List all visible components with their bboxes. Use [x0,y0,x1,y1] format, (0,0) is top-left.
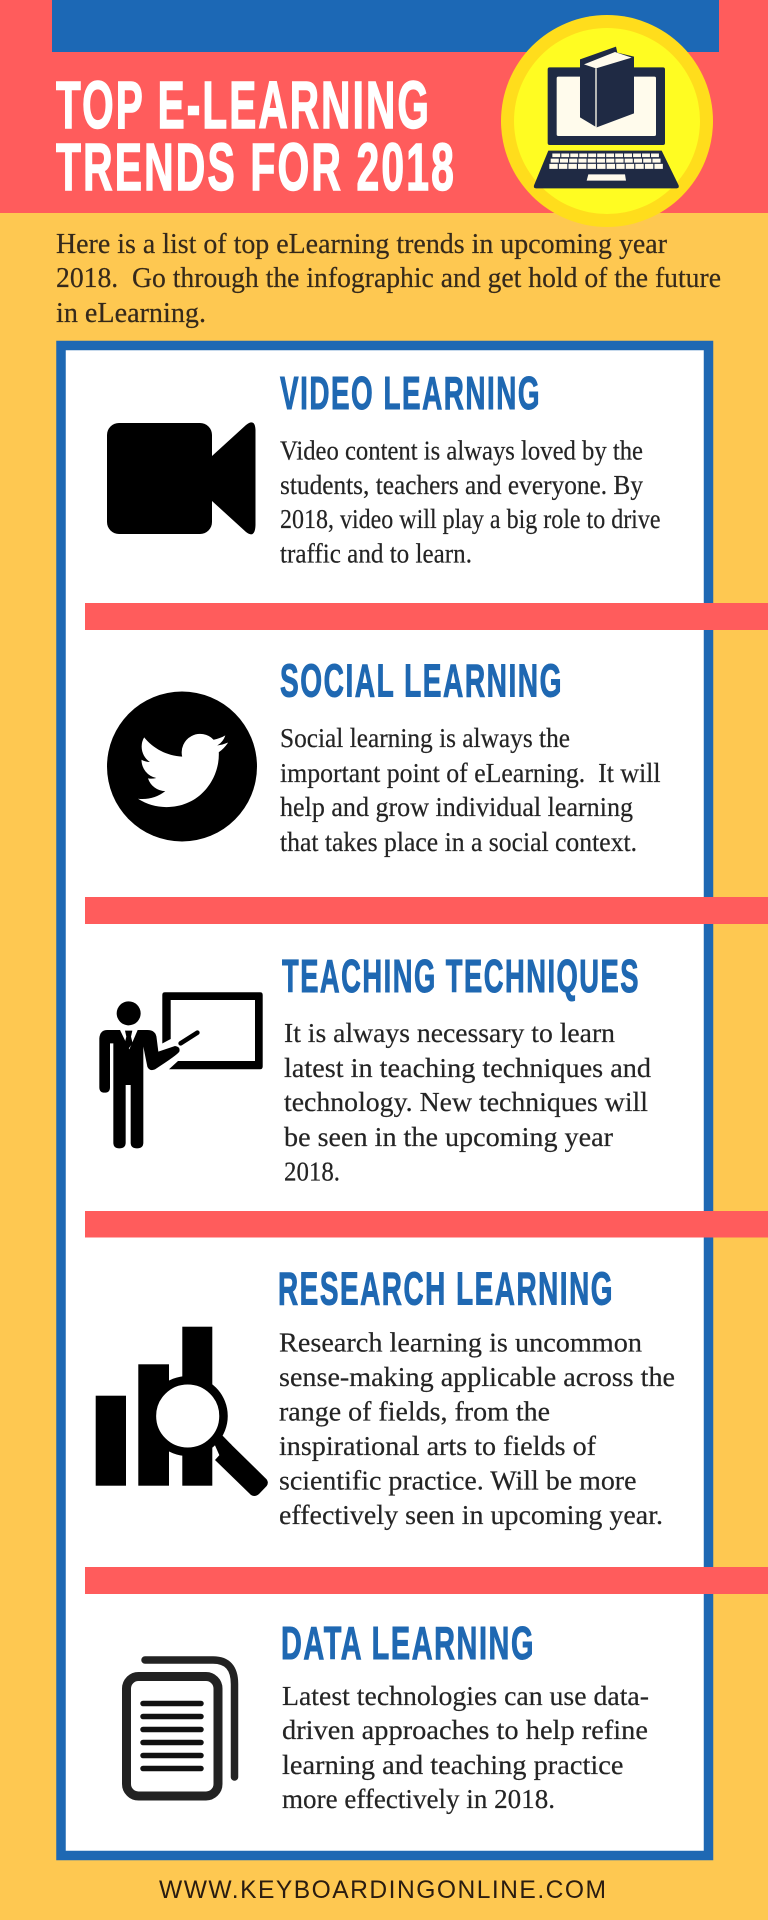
text: teaching techniques: It is always necessary to learn [284,1018,616,1048]
icon: video camera [107,422,256,534]
header band [0,0,768,213]
top blue bar [52,0,719,52]
divider bar 3 [85,1211,768,1238]
panel: data learning [126,1617,649,1814]
title: TOP E-LEARNING [56,68,431,143]
icon: teacher at board [99,992,263,1148]
intro text [56,229,721,329]
panel: content frame [61,346,708,1856]
icon: twitter bird [107,692,257,842]
text: video learning: 2018, video will play a big role to drive [280,504,661,534]
panel: social learning [107,654,660,857]
panel: research learning [96,1262,675,1530]
text: data learning: driven approaches to help refine [282,1715,648,1745]
text: social learning [280,723,660,857]
text: teaching techniques: latest in teaching techniques and [284,1053,652,1083]
panel: video learning [107,367,661,568]
text: data learning: more effectively in 2018. [282,1784,555,1814]
heading: video learning: VIDEO LEARNING [280,367,541,419]
divider bar 1 [85,603,768,630]
text: research learning: sense-making applicable across the [279,1362,675,1392]
text: research learning [279,1328,675,1530]
intro text: 2018. Go through the infographic and get hold of the future [56,263,721,294]
intro text: in eLearning. [56,298,206,329]
intro text: Here is a list of top eLearning trends in upcoming year [56,229,668,260]
text: research learning: range of fields, from the [279,1396,550,1426]
icon: documents [126,1660,234,1796]
text: social learning: help and grow individual learning [280,792,633,822]
text: research learning: inspirational arts to fields of [279,1431,596,1461]
title: TRENDS FOR 2018 [56,130,456,205]
text: teaching techniques: technology. New techniques will [284,1087,648,1117]
icon: bars and magnifier [96,1327,268,1496]
text: research learning: Research learning is uncommon [279,1328,643,1358]
text: teaching techniques [284,1018,652,1186]
text: social learning: Social learning is always the [280,723,570,753]
text: video learning: Video content is always loved by the [280,436,643,466]
text: teaching techniques: be seen in the upcoming year [284,1122,613,1152]
title [56,68,456,205]
text: teaching techniques: 2018. [284,1156,340,1186]
footer url: WWW.KEYBOARDINGONLINE.COM [159,1876,608,1904]
text: research learning: scientific practice. Will be more [279,1466,637,1496]
divider bar 4 [85,1567,768,1594]
text: data learning [282,1681,649,1814]
text: data learning: learning and teaching practice [282,1750,624,1780]
text: video learning [280,436,661,568]
text: video learning: students, teachers and everyone. By [280,470,643,500]
text: social learning: that takes place in a social context. [280,827,637,857]
heading: social learning: SOCIAL LEARNING [280,654,563,706]
text: social learning: important point of eLearning. It will [280,758,660,788]
icon: laptop with book badge [501,15,713,227]
text: research learning: effectively seen in upcoming year. [279,1500,663,1530]
panel: teaching techniques [99,950,652,1186]
heading: data learning: DATA LEARNING [281,1617,535,1669]
text: video learning: traffic and to learn. [280,538,472,568]
divider bar 2 [85,897,768,924]
text: data learning: Latest technologies can use data- [282,1681,649,1711]
